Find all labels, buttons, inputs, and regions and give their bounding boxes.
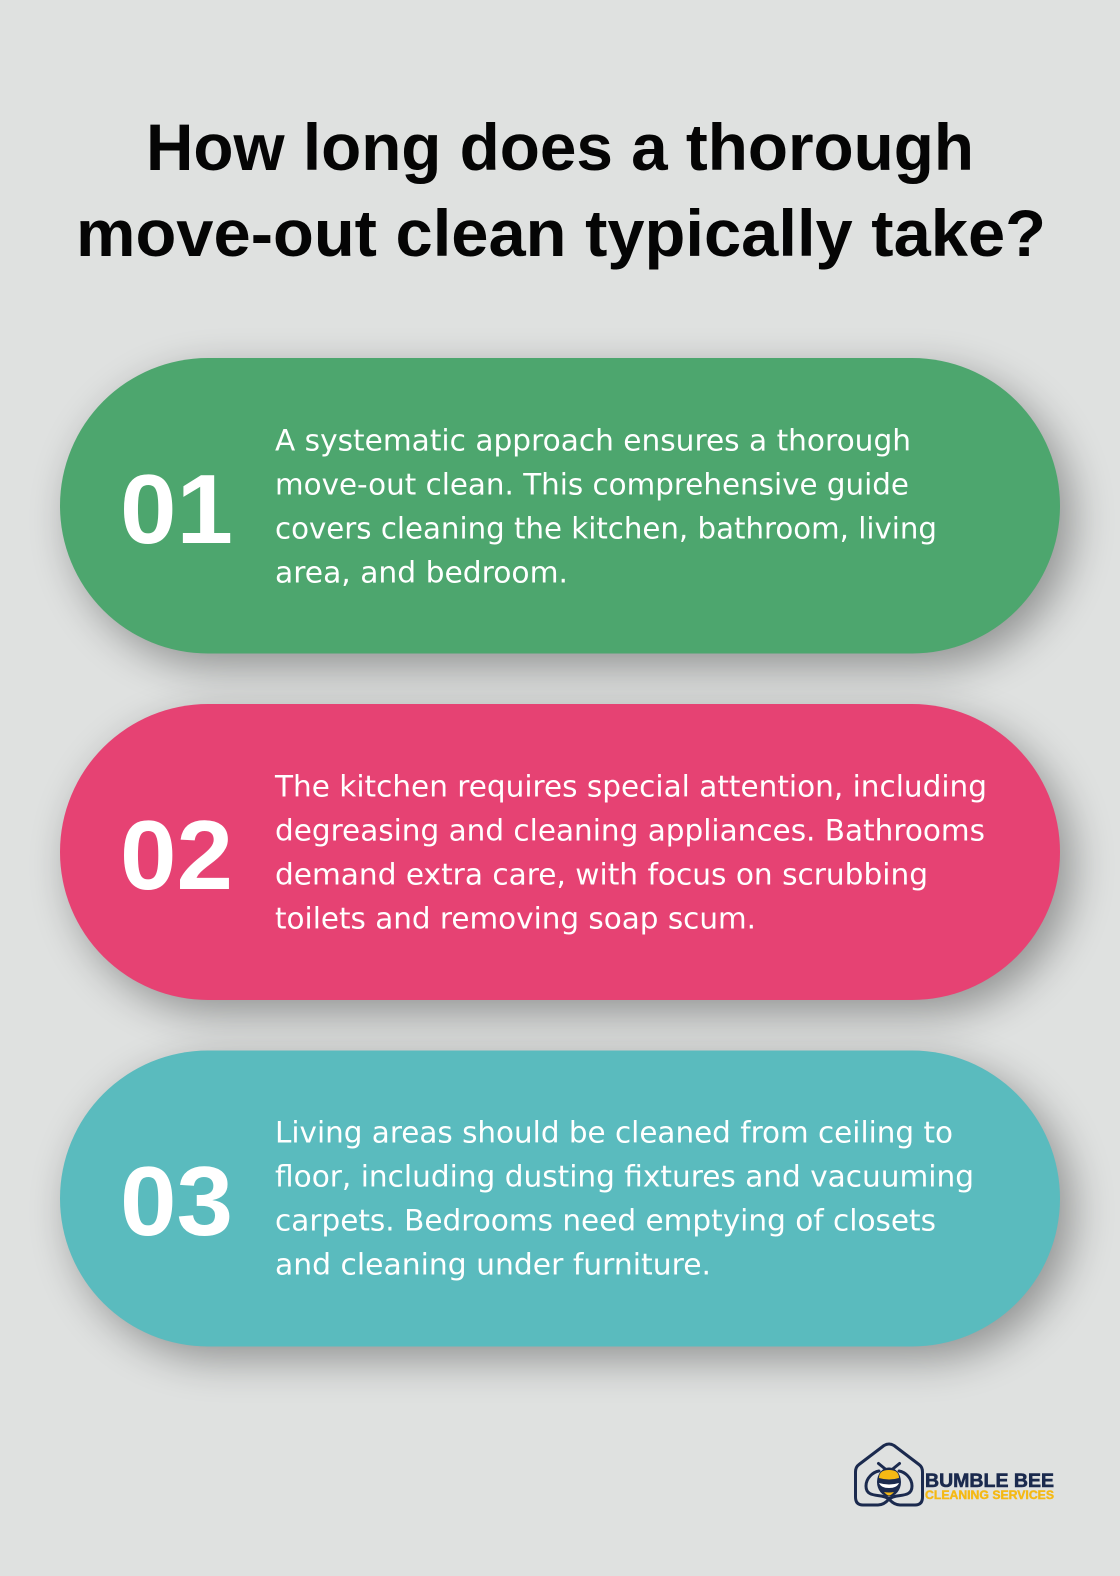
panel: step 01 [60,358,1072,667]
number 02: 02 [120,800,233,910]
title: How long does a thorough [146,110,974,184]
text: step 02 description: toilets and removing soap scum. [275,902,756,936]
text: step 03 description [275,1116,974,1282]
text: step 03 description: Living areas should be cleaned from ceiling to [275,1116,953,1150]
icon: house outline with bee [856,1444,922,1505]
text: step 03 description: carpets. Bedrooms need emptying of closets [275,1204,936,1238]
text: step 01 description [275,424,937,590]
title [76,110,1046,270]
logo: Bumble Bee Cleaning Services [856,1444,1054,1505]
text: step 02 description [274,770,987,936]
title: move-out clean typically take? [76,196,1046,270]
text: step 01 description: covers cleaning the kitchen, bathroom, living [275,512,937,546]
text: step 01 description: area, and bedroom. [275,556,568,590]
text: step 02 description: The kitchen requires special attention, including [274,770,987,804]
text: step 03 description: and cleaning under furniture. [275,1248,711,1282]
text: step 02 description: demand extra care, with focus on scrubbing [275,858,928,892]
number 01: 01 [120,454,233,564]
panel: step 03 [60,1050,1072,1359]
number 03: 03 [120,1146,233,1256]
panel: step 02 [60,704,1072,1013]
text: Bumble Bee: BUMBLE BEE [925,1470,1054,1492]
text: Cleaning Services: CLEANING SERVICES [925,1490,1054,1502]
text: step 01 description: A systematic approach ensures a thorough [275,424,911,458]
text: step 03 description: floor, including dusting fixtures and vacuuming [275,1160,974,1194]
text: step 01 description: move-out clean. This comprehensive guide [275,468,909,502]
text: step 02 description: degreasing and cleaning appliances. Bathrooms [275,814,985,848]
